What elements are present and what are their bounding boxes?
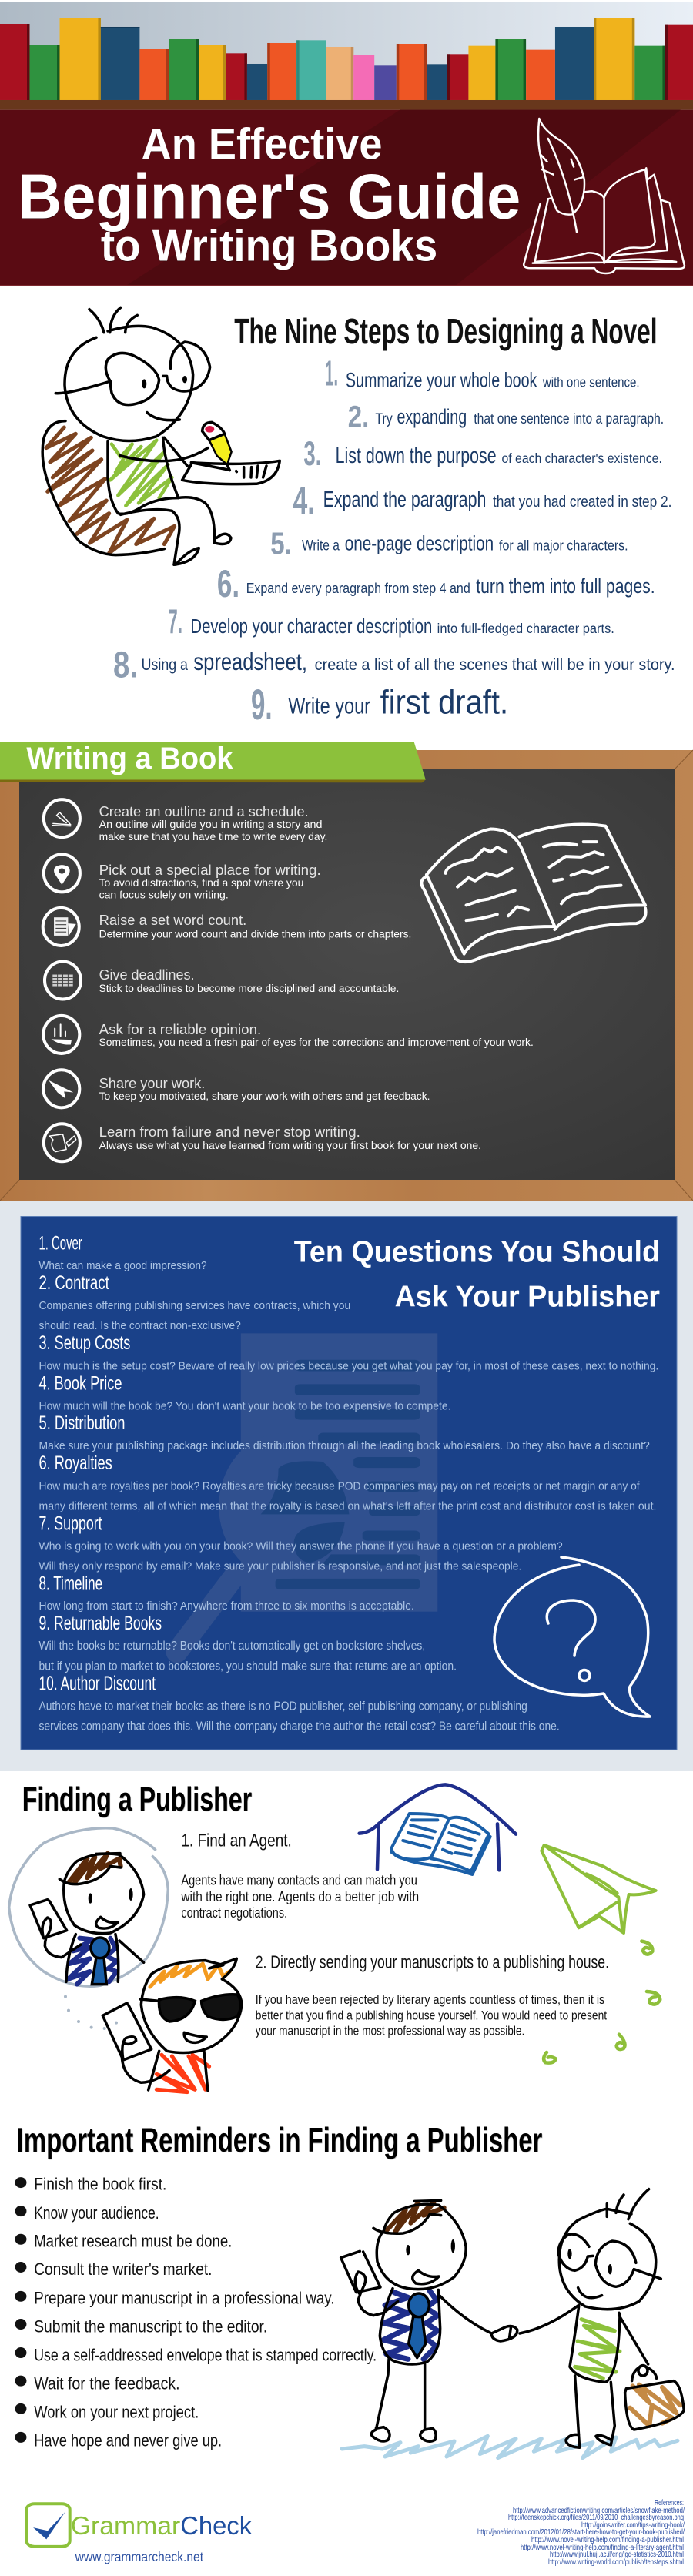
frame mitre lines bbox=[0, 750, 693, 1201]
item: learn bbox=[44, 1124, 481, 1161]
question 1: What can make a good impression? bbox=[39, 1259, 207, 1272]
step 6: Expand every paragraph from step 4 and bbox=[246, 581, 470, 597]
item: share: To keep you motivated, share your work with others and get feedback. bbox=[99, 1090, 430, 1102]
option 2 bbox=[256, 1952, 609, 2038]
item: share: Share your work. bbox=[99, 1075, 205, 1091]
publisher figure with sunglasses bbox=[102, 1958, 242, 2092]
item: outline: make sure that you have time to write every day. bbox=[99, 830, 327, 842]
question 9 text: Will the books be returnable? Books don't automatically get on bookstore shelves, bbox=[39, 1640, 425, 1653]
icon: speech bubble with question mark bbox=[494, 1557, 650, 1717]
question 1 bbox=[39, 1233, 207, 1272]
head bbox=[65, 326, 193, 440]
logo badge bbox=[26, 2504, 70, 2547]
watermark: document with magnifier bbox=[177, 1333, 437, 1652]
item: word count: Raise a set word count. bbox=[99, 912, 246, 928]
step 5: 5. bbox=[270, 527, 292, 561]
left man bbox=[341, 2200, 579, 2441]
item: place: Pick out a special place for writing. bbox=[99, 862, 321, 878]
item: outline bbox=[44, 799, 327, 842]
wooden frame bbox=[0, 750, 693, 1201]
question 4 bbox=[39, 1373, 450, 1412]
banner facet bbox=[126, 110, 681, 286]
question 10: 10. Author Discount bbox=[39, 1673, 156, 1695]
option 1: contract negotiations. bbox=[181, 1905, 287, 1921]
step 2 bbox=[348, 400, 664, 433]
reminder 7: Use a self-addressed envelope that is stamped correctly. bbox=[34, 2346, 377, 2364]
question 10 bbox=[39, 1673, 560, 1733]
reminder 10: Have hope and never give up. bbox=[34, 2431, 222, 2450]
ten questions text and finding a publisher bbox=[22, 1640, 609, 2038]
reminder 1 bbox=[15, 2175, 166, 2194]
books on shelf bbox=[0, 18, 693, 100]
question 5: 5. Distribution bbox=[39, 1413, 125, 1434]
right man bbox=[558, 2189, 661, 2447]
decorative gray dots bbox=[64, 1995, 118, 2030]
step 3 bbox=[303, 435, 662, 473]
chalk open book bbox=[421, 824, 646, 962]
reminder 3: Market research must be done. bbox=[34, 2232, 232, 2251]
panel: nine steps bbox=[0, 285, 693, 729]
reminder 8: Wait for the feedback. bbox=[34, 2374, 180, 2393]
notebook bbox=[182, 461, 280, 484]
reminder 9: Work on your next project. bbox=[34, 2403, 199, 2421]
chair scribble bbox=[46, 427, 175, 553]
step 6 bbox=[217, 562, 655, 605]
step 5 bbox=[270, 527, 628, 561]
reminder 6: Submit the manuscript to the editor. bbox=[34, 2317, 267, 2336]
item: word count: Determine your word count and divide them into parts or chapters. bbox=[99, 927, 411, 940]
agent figure bbox=[30, 1854, 144, 1985]
ten questions text and finding a publisher: Finding a Publisher bbox=[22, 1780, 252, 1818]
question 2: should read. Is the contract non-exclusive? bbox=[39, 1320, 241, 1332]
slate bbox=[19, 769, 675, 1180]
question 4: 4. Book Price bbox=[39, 1373, 122, 1394]
divider line under header bbox=[0, 285, 693, 286]
ten questions text, top part bbox=[39, 1233, 660, 1634]
reminder 5: Prepare your manuscript in a professional way. bbox=[34, 2288, 335, 2307]
reminder 5 bbox=[15, 2288, 335, 2307]
item: outline: Create an outline and a schedule. bbox=[99, 803, 309, 819]
website url: www.grammarcheck.net bbox=[75, 2550, 203, 2564]
reminder 6 bbox=[15, 2317, 267, 2336]
item: opinion bbox=[43, 1016, 534, 1054]
step 2: expanding bbox=[397, 406, 467, 428]
reminder 4 bbox=[15, 2259, 213, 2279]
question 9 text bbox=[39, 1640, 457, 1673]
background: light gray band bbox=[0, 1201, 693, 1771]
panel: writing a book bbox=[0, 742, 646, 1161]
item: place: To avoid distractions, find a spot where you bbox=[99, 876, 303, 889]
title: An Effective: An Effective bbox=[142, 120, 383, 169]
header panel bbox=[0, 2, 693, 286]
body, chair and legs bbox=[42, 421, 231, 564]
step 8 bbox=[113, 645, 675, 685]
reminder 10 bbox=[15, 2431, 222, 2450]
reminder 3 bbox=[15, 2232, 232, 2251]
step 1 bbox=[325, 353, 640, 394]
item: place: can focus solely on writing. bbox=[99, 888, 229, 900]
question 2: Companies offering publishing services have contracts, which you bbox=[39, 1300, 350, 1312]
glasses bbox=[55, 342, 210, 405]
reminder 8 bbox=[15, 2374, 180, 2393]
logo check bbox=[33, 2512, 65, 2539]
step 9: 9. bbox=[251, 681, 273, 729]
gray circle bbox=[9, 1828, 168, 1986]
ten questions text, top part: 9. Returnable Books bbox=[39, 1613, 162, 1634]
step 3: List down the purpose bbox=[336, 443, 497, 467]
step 8: 8. bbox=[113, 645, 138, 685]
step 4 bbox=[293, 479, 671, 522]
ground scribble bbox=[342, 2436, 678, 2458]
item: place bbox=[44, 854, 321, 900]
question 1: 1. Cover bbox=[39, 1233, 82, 1255]
question 7 bbox=[39, 1513, 563, 1573]
item: deadlines: Stick to deadlines to become more disciplined and accountable. bbox=[99, 982, 399, 994]
character writing in chair bbox=[42, 307, 280, 564]
item: word count bbox=[43, 908, 411, 946]
option 1 bbox=[181, 1831, 419, 1921]
reminder list bbox=[15, 2175, 377, 2450]
bookshelf backdrop bbox=[0, 2, 693, 102]
question 5 bbox=[39, 1413, 650, 1452]
step 7: 7. bbox=[168, 603, 182, 641]
icon: publishing house bbox=[360, 1784, 516, 1874]
step 9: first draft. bbox=[380, 684, 508, 722]
step 1: 1. bbox=[325, 353, 338, 394]
reminder 9 bbox=[15, 2403, 199, 2421]
face bbox=[142, 376, 187, 420]
question 2 bbox=[39, 1273, 350, 1332]
step 7: Develop your character description bbox=[190, 615, 432, 638]
reminder 2 bbox=[15, 2203, 159, 2223]
question 6: 6. Royalties bbox=[39, 1453, 112, 1474]
title: to Writing Books: to Writing Books bbox=[101, 221, 437, 270]
question 8: 8. Timeline bbox=[39, 1573, 102, 1594]
shirt scribble bbox=[110, 440, 172, 506]
item: deadlines: Give deadlines. bbox=[99, 966, 195, 983]
logo wordmark: Check bbox=[180, 2511, 253, 2541]
step 5: Write a bbox=[302, 538, 340, 554]
step 3: 3. bbox=[303, 435, 321, 473]
logo: GrammarCheck bbox=[26, 2504, 253, 2564]
question 8 bbox=[39, 1573, 414, 1613]
reminder 4: Consult the writer's market. bbox=[34, 2259, 213, 2279]
icon: paper plane bbox=[541, 1845, 656, 1933]
question 3: 3. Setup Costs bbox=[39, 1333, 130, 1354]
green banner bbox=[0, 742, 426, 782]
step 9: Write your bbox=[288, 694, 370, 719]
question 7: 7. Support bbox=[39, 1513, 102, 1534]
reminder 7 bbox=[15, 2346, 377, 2364]
icon: open book and quill bbox=[524, 119, 685, 273]
question 3 bbox=[39, 1333, 658, 1372]
item: deadlines bbox=[45, 962, 399, 1000]
step 2: Try bbox=[375, 410, 393, 427]
hair bbox=[89, 307, 137, 333]
panel: chalkboard frame bbox=[0, 750, 693, 1201]
item: share bbox=[43, 1070, 430, 1107]
heading bbox=[294, 1235, 660, 1313]
plane trail swirls bbox=[544, 1941, 660, 2063]
question 2: 2. Contract bbox=[39, 1273, 109, 1294]
option 1: with the right one. Agents do a better job with bbox=[181, 1889, 419, 1905]
briefcase bbox=[625, 2366, 684, 2430]
step 5: one-page description bbox=[345, 533, 494, 555]
step 6: 6. bbox=[217, 562, 239, 605]
green banner: Writing a Book bbox=[26, 742, 233, 775]
step 8: Using a bbox=[142, 655, 188, 674]
panel: ten questions bbox=[21, 1217, 677, 1750]
item: learn: Learn from failure and never stop writing. bbox=[99, 1124, 360, 1140]
question 8: How long from start to finish? Anywhere from three to six months is acceptable. bbox=[39, 1600, 414, 1613]
item: opinion: Ask for a reliable opinion. bbox=[99, 1021, 261, 1037]
step 4: Expand the paragraph bbox=[323, 487, 486, 511]
step 4: 4. bbox=[293, 479, 315, 522]
wooden shelf bbox=[0, 100, 693, 110]
panel: important reminders bbox=[15, 2121, 542, 2564]
step 7 bbox=[168, 603, 614, 641]
step 9 bbox=[251, 681, 508, 729]
step 8: spreadsheet, bbox=[193, 648, 307, 675]
item: learn: Always use what you have learned from writing your first book for your next one. bbox=[99, 1139, 481, 1151]
step 2: 2. bbox=[348, 400, 369, 433]
logo wordmark: Grammar bbox=[71, 2511, 180, 2541]
pencil bbox=[203, 422, 232, 471]
title banner bbox=[0, 110, 693, 286]
question 6 bbox=[39, 1453, 656, 1512]
references bbox=[477, 2499, 685, 2567]
two characters shaking hands bbox=[341, 2189, 684, 2458]
option 1: 1. Find an Agent. bbox=[181, 1831, 292, 1851]
reminder 1: Finish the book first. bbox=[34, 2175, 166, 2194]
item: outline: An outline will guide you in writing a story and bbox=[99, 818, 322, 830]
figures: agent and publisher bbox=[9, 1828, 242, 2092]
reminder 2: Know your audience. bbox=[34, 2203, 159, 2223]
option 1: Agents have many contacts and can match you bbox=[181, 1872, 417, 1888]
